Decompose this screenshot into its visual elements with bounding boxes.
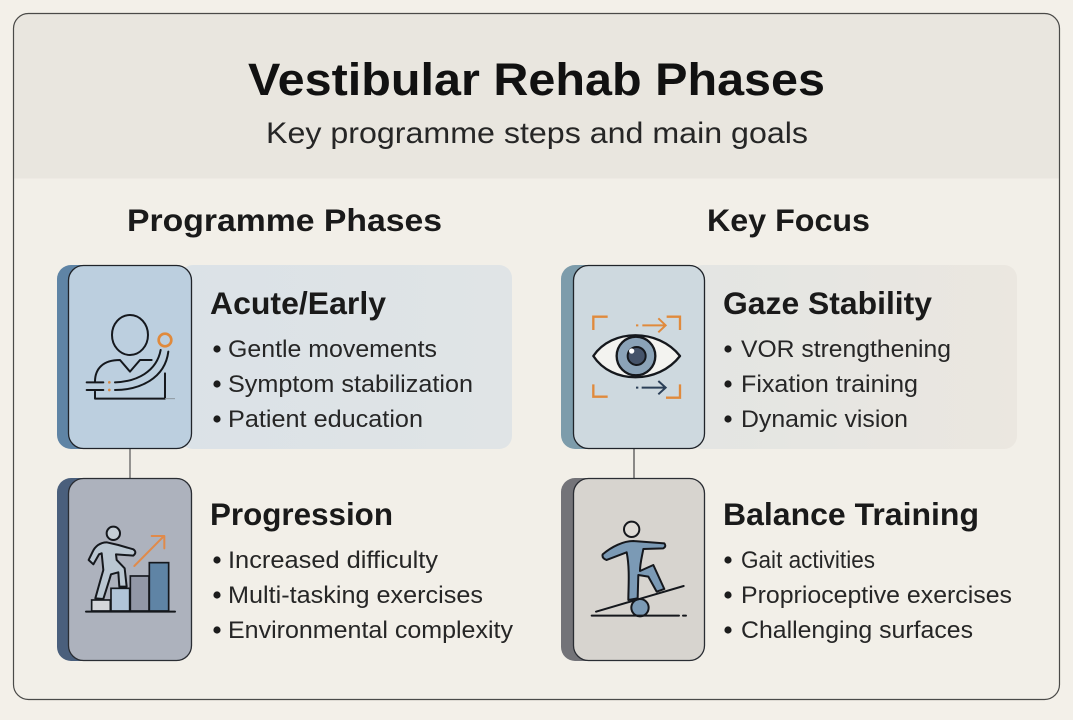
card: Gaze Stability [574,266,704,448]
card tab: Balance Training [561,478,621,661]
icon: person climbing rising bars [86,527,175,612]
icon: figure balancing on tilted board [592,522,686,616]
card: Balance Training [574,478,704,660]
bullet list: Balance Training: Gait activities [741,547,875,574]
bullet list: Gaze Stability: VOR strengthening [741,336,951,363]
card title: Gaze Stability: Gaze Stability [723,285,932,321]
bullet list: Balance Training [724,547,1012,644]
bullet list: Gaze Stability: Fixation training [741,371,918,398]
card tab: Acute/Early [57,265,117,449]
bullet list: Balance Training: Proprioceptive exercises [741,582,1012,609]
panel: Progression [57,478,514,661]
bullet list: Gaze Stability: Dynamic vision [741,406,908,433]
card tab: Gaze Stability [561,265,621,449]
bullet list: Progression: Increased difficulty [228,547,439,574]
text background: Acute/Early [180,265,512,449]
bullet list: Acute/Early: Gentle movements [228,336,437,363]
bullet list: Acute/Early: Patient education [228,406,423,433]
bullet list: Gaze Stability [724,336,951,433]
icon: eye with focus brackets and arrows [593,317,680,398]
bullet list: Acute/Early: Symptom stabilization [228,371,473,398]
bullet list: Progression [213,547,514,644]
card title: Balance Training: Balance Training [723,496,979,532]
subtitle: Key programme steps and main goals [266,117,808,150]
heading: programme phases: Programme Phases [127,202,442,238]
heading: key focus: Key Focus [707,202,870,238]
panel: Balance Training [561,478,1012,661]
connector: right column [633,449,635,478]
title: Vestibular Rehab Phases [248,54,825,105]
card tab: Progression [57,478,117,661]
card: Progression [68,478,192,660]
card title: Acute/Early: Acute/Early [210,285,386,321]
bullet list: Acute/Early [213,336,473,433]
text background: Gaze Stability [690,265,1017,449]
card title: Progression: Progression [210,496,393,532]
icon: person with arm movement arc [87,315,175,399]
card: Acute/Early [68,266,192,448]
connector: left column [129,449,131,478]
bullet list: Progression: Environmental complexity [228,617,514,644]
panel: Gaze Stability [561,265,1017,449]
bullet list: Progression: Multi-tasking exercises [228,582,483,609]
panel: Acute/Early [57,265,512,449]
bullet list: Balance Training: Challenging surfaces [741,617,973,644]
